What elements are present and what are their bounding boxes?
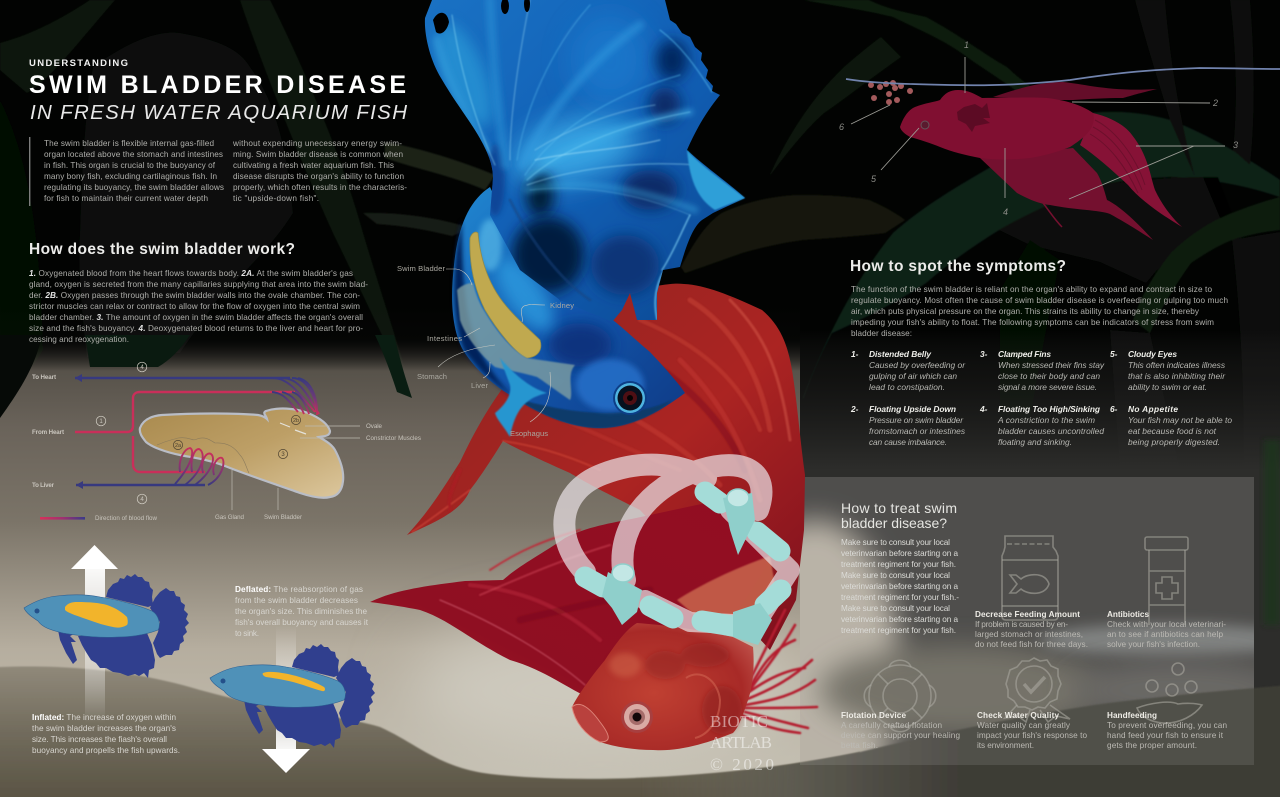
symptoms list: lead to constipation. xyxy=(869,382,945,392)
item: handfeeding: gets the proper amount. xyxy=(1107,741,1197,750)
heading: how does the swim bladder work: How does the swim bladder work? xyxy=(29,241,295,258)
body of blue fish xyxy=(452,187,685,428)
step markers xyxy=(96,362,301,504)
intro text block: tic "upside-down fish". xyxy=(233,194,319,203)
intro text block: ming. Swim bladder disease is common when xyxy=(233,150,403,159)
intro text block: cultivating a fresh water aquarium fish. This xyxy=(233,161,394,170)
notches at top of tail xyxy=(433,13,449,34)
symptoms list: 4- xyxy=(979,404,988,414)
text: inflated: size. This increases the fiash's overall xyxy=(32,735,167,744)
intro text block: organ located above the stomach and intestines xyxy=(44,150,223,159)
symptoms list: can cause imbalance. xyxy=(869,437,947,447)
item: flotation device: device can support your healing xyxy=(841,731,960,740)
fin: lower left red fin xyxy=(370,500,770,698)
gland outline xyxy=(157,438,249,473)
symptoms list: ability to swim or eat. xyxy=(1128,382,1207,392)
diagram labels xyxy=(32,374,421,521)
step markers: 4 xyxy=(140,496,144,503)
title block: IN FRESH WATER AQUARIUM FISH xyxy=(30,101,407,124)
item: antibiotics: Check with your local veterinari- xyxy=(1107,620,1226,629)
panel heading: How to treat swim xyxy=(841,500,957,516)
symptoms list: 6- xyxy=(1110,404,1118,414)
dorsal spikes of red fish xyxy=(740,610,817,733)
internal organs xyxy=(457,283,575,400)
intro text block: properly, which often results in the characteris- xyxy=(233,183,407,192)
panel heading: bladder disease? xyxy=(841,515,947,531)
symptoms list: signal a more severe issue. xyxy=(998,382,1097,392)
intro text block: disease disrupts the organ's ability to function xyxy=(233,172,404,181)
text: inflated xyxy=(32,713,180,755)
callout numbers: 2 xyxy=(1212,98,1218,108)
organ labels on blue fish: Intestines xyxy=(427,334,462,343)
streaks on red fins xyxy=(412,300,790,685)
heading: symptoms: How to spot the symptoms? xyxy=(850,258,1066,275)
item: antibiotics xyxy=(1107,610,1226,649)
leaves: left plants xyxy=(0,0,495,420)
eye of red fish xyxy=(621,701,653,733)
soft wide fin rays xyxy=(437,0,695,210)
pectoral fin xyxy=(957,103,990,132)
intro text block: without expending unecessary energy swim- xyxy=(232,139,402,148)
title block xyxy=(29,58,407,124)
step markers: 1 xyxy=(99,418,103,425)
symptoms list: being properly digested. xyxy=(1128,437,1220,447)
symptoms intro text: bladder disease: xyxy=(851,329,912,338)
text: deflated: from the swim bladder decreases xyxy=(235,596,358,605)
tail xyxy=(1080,113,1182,227)
top fin xyxy=(993,82,1157,100)
symptoms list: Floating Upside Down xyxy=(869,404,956,414)
intro text block: The swim bladder is flexible internal gas-filled xyxy=(44,139,214,148)
fish anatomy diagram xyxy=(839,40,1280,240)
callout numbers xyxy=(839,40,1238,217)
symptoms list: close to their body and can xyxy=(998,371,1100,381)
lips xyxy=(572,704,608,742)
panel: treatment background xyxy=(800,477,1254,765)
explanation text: 1. Oxygenated blood from the heart flows towards body. 2A. At the swim bladder's gas xyxy=(29,269,353,278)
right dark water fade xyxy=(800,330,1280,797)
explanation text: cessing and reoxygenation. xyxy=(29,335,129,344)
sand lighting behind panel xyxy=(800,477,1254,763)
red betta fish illustration xyxy=(370,284,817,750)
watermark: © 2020 xyxy=(710,755,774,774)
explanation text: gland, oxygen is secreted from the many capillaries supplying that area into the swim blad- xyxy=(29,280,368,289)
intro text block: many bony fish, excluding cartilaginous fish. In xyxy=(44,172,217,181)
explanation text: size and the fish's buoyancy. 4. Deoxygenated blood returns to the liver and heart for pro- xyxy=(29,324,363,333)
symptoms list: bladder causes uncontrolled xyxy=(998,426,1104,436)
symptoms list: Clamped Fins xyxy=(998,349,1051,359)
diagram labels: To Heart xyxy=(32,374,56,381)
deflated organ xyxy=(263,672,325,691)
constrictor dashes xyxy=(280,423,306,434)
diagram labels: Swim Bladder xyxy=(264,514,302,521)
symptoms list: 1- xyxy=(851,349,859,359)
foreground dune left xyxy=(0,667,860,797)
intro text block: in fish. This organ is crucial to the buoyancy of xyxy=(44,161,216,170)
foreground dune right xyxy=(640,685,1280,797)
anal fin xyxy=(980,148,1153,240)
organ labels on blue fish: Liver xyxy=(471,381,488,390)
panel intro text: veterinvarian before starting on a xyxy=(841,615,958,624)
body xyxy=(210,665,345,707)
thin fin rays xyxy=(452,0,712,319)
connectors xyxy=(585,492,781,626)
item: decrease feeding: Decrease Feeding Amount xyxy=(975,610,1080,619)
swim bladder diagram xyxy=(32,362,421,522)
fins xyxy=(57,574,189,678)
panel intro text: veterinvarian before starting on a xyxy=(841,582,958,591)
symptoms list: Distended Belly xyxy=(869,349,931,359)
title block: SWIM BLADDER DISEASE xyxy=(29,71,406,99)
pectoral fin of blue fish xyxy=(495,358,547,437)
item: antibiotics: an to see if antibiotics can help xyxy=(1107,630,1223,639)
water line xyxy=(846,68,1280,85)
body xyxy=(24,595,159,637)
diagram labels: To Liver xyxy=(32,482,55,489)
item: water quality: Water quality can greatly xyxy=(977,721,1071,730)
item: flotation device: A carefully crafted flotation xyxy=(841,721,942,730)
panel intro text: veterinvarian before starting on a xyxy=(841,549,958,558)
icon: medicine bottle xyxy=(1145,537,1188,625)
item: water quality: Check Water Quality xyxy=(977,711,1059,720)
blue return line to heart xyxy=(75,377,290,379)
head highlight xyxy=(576,359,644,411)
text: inflated: Inflated: The increase of oxygen within xyxy=(32,713,176,722)
icon: quality badge xyxy=(1005,658,1070,722)
belly of red fish xyxy=(677,556,775,625)
item: water quality xyxy=(977,711,1087,750)
eye of blue fish xyxy=(613,381,647,415)
panel intro text: treatment regiment for your fish. xyxy=(841,560,956,569)
item: water quality: its environment. xyxy=(977,741,1034,750)
symptoms list: 2- xyxy=(850,404,859,414)
symptoms list: gulping of air which can xyxy=(869,371,957,381)
panel intro text: Make sure to consult your local xyxy=(841,571,950,580)
text: deflated: the organ's size. This diminishes the xyxy=(235,607,367,616)
symptoms list: 3- xyxy=(980,349,988,359)
symptoms list: Caused by overfeeding or xyxy=(869,360,966,370)
watermark: ARTLAB xyxy=(710,733,772,752)
text: deflated: Deflated: The reabsorption of gas xyxy=(235,585,363,594)
callout numbers: 3 xyxy=(1233,140,1238,150)
flotation ring device xyxy=(564,465,790,645)
icon: fish food jar xyxy=(1002,536,1058,620)
step markers: 3 xyxy=(281,452,285,458)
symptoms list: eat because food is not xyxy=(1128,426,1217,436)
panel intro text xyxy=(841,538,959,635)
symptoms list: Your fish may not be able to xyxy=(1128,415,1232,425)
icon: hand with pellets xyxy=(1137,663,1202,723)
symptoms intro text: The function of the swim bladder is reliant on the organ's ability to expand and contract in size to xyxy=(851,285,1212,294)
symptoms list: Pressure on swim bladder xyxy=(869,415,964,425)
inflated organ xyxy=(65,602,128,628)
diagram labels: Constrictor Muscles xyxy=(366,435,421,442)
item: flotation device xyxy=(841,711,960,750)
symptoms intro text: regulate buoyancy. Most often the cause of swim bladder disease is overfeeding or gulping too much xyxy=(851,296,1228,305)
explanation text: der. 2B. Oxygen passes through the swim bladder walls into the ovale chamber. The con- xyxy=(29,291,360,300)
arrow: up xyxy=(71,545,118,724)
symptoms list: When stressed their fins stay xyxy=(998,360,1105,370)
symptoms intro text: air, which puts physical pressure on the organ. This strains its ability to change in size, thereby xyxy=(851,307,1200,316)
organ labels on blue fish: Esophagus xyxy=(510,429,548,438)
item: handfeeding: Handfeeding xyxy=(1107,711,1157,720)
symptoms intro text xyxy=(851,285,1228,338)
panel: treatment content xyxy=(841,500,1227,750)
icon: life ring xyxy=(864,660,936,732)
symptoms intro text: impeding your fish's ability to float. The following symptoms can be indicators of stress from swim xyxy=(851,318,1214,327)
fins xyxy=(243,644,375,748)
scale highlights xyxy=(486,250,564,340)
callout numbers: 1 xyxy=(964,40,969,50)
upper capillary loops xyxy=(272,378,319,415)
item: decrease feeding xyxy=(975,610,1088,649)
head of red fish xyxy=(572,623,754,750)
explanation text: bladder chamber. 3. The amount of oxygen in the swim bladder affects the organ's overall xyxy=(29,313,363,322)
vein to liver xyxy=(76,484,205,486)
swim bladder organ xyxy=(470,232,541,358)
organ labels on blue fish xyxy=(397,264,574,438)
callout numbers: 4 xyxy=(1003,207,1008,217)
diagram labels: From Heart xyxy=(32,429,64,436)
panel heading xyxy=(841,500,957,531)
fin: upper red fin xyxy=(407,284,805,650)
step markers: 2b xyxy=(293,418,299,424)
watermark: BIOTIC xyxy=(710,712,768,731)
explanation text: strictor muscles can relax or contract to allow for the flow of oxygen into the central swim xyxy=(29,302,360,311)
fish: deflated bladder xyxy=(210,644,375,748)
symptoms list: This often indicates illness xyxy=(1128,360,1226,370)
intro text block: for fish to maintain their current water depth xyxy=(44,194,208,203)
symptoms list: fromstomach or intestines xyxy=(869,426,966,436)
item: flotation device: betta fish. xyxy=(841,741,878,750)
callout numbers: 6 xyxy=(839,122,844,132)
text: deflated: fish's overall buoyancy and causes it xyxy=(235,618,369,627)
organ labels on blue fish: Stomach xyxy=(417,372,447,381)
diagram labels: Gas Gland xyxy=(215,514,245,521)
bladder organ xyxy=(140,409,343,498)
T-joints xyxy=(602,493,772,645)
small cyan fin xyxy=(687,150,745,210)
item: antibiotics: Antibiotics xyxy=(1107,610,1149,619)
watermark xyxy=(710,712,774,774)
diagram labels: Ovale xyxy=(366,423,383,430)
step markers: 2a xyxy=(175,443,182,449)
step markers: 4 xyxy=(140,364,144,371)
text: deflated: to sink. xyxy=(235,629,259,638)
text: deflated xyxy=(235,585,369,638)
fan tail of blue fish xyxy=(420,0,750,330)
clear tubes xyxy=(564,465,790,625)
symptoms list: floating and sinking. xyxy=(998,437,1072,447)
blue betta fish illustration xyxy=(420,0,750,437)
organ labels on blue fish: Swim Bladder xyxy=(397,264,445,273)
text: inflated: the swim bladder increases the organ's xyxy=(32,724,176,733)
fish: inflated bladder xyxy=(24,574,189,678)
lower capillary loops xyxy=(175,448,223,485)
eye xyxy=(220,678,226,684)
symptoms list: that is also inhibiting their xyxy=(1128,371,1226,381)
panel intro text: treatment regiment for your fish. xyxy=(841,626,956,635)
body xyxy=(900,90,1094,160)
item: antibiotics: solve your fish's infection. xyxy=(1107,640,1200,649)
item: decrease feeding: do not feed fish for three days. xyxy=(975,640,1088,649)
food pellets xyxy=(868,80,913,105)
eye xyxy=(34,608,40,614)
intro text block: regulating its buoyancy, the swim bladder allows xyxy=(44,183,224,192)
symptoms list: 5- xyxy=(1110,349,1118,359)
text: inflated: buoyancy and propells the fish upwards. xyxy=(32,746,180,755)
sand floor xyxy=(0,305,800,797)
symptoms list xyxy=(850,349,1232,447)
leaves: right plants xyxy=(681,0,1280,470)
symptoms list: A constriction to the swim xyxy=(997,415,1095,425)
eye xyxy=(921,121,929,129)
item: handfeeding: hand feed your fish to ensure it xyxy=(1107,731,1224,740)
symptoms list: Floating Too High/Sinking xyxy=(998,404,1100,414)
panel intro text: Make sure to consult your local xyxy=(841,538,950,547)
legend: direction of blood flow: Direction of blood flow xyxy=(95,515,158,522)
symptoms list: No Appetite xyxy=(1128,404,1178,414)
panel intro text: treatment regiment for your fish.- xyxy=(841,593,959,602)
item: handfeeding xyxy=(1107,711,1227,750)
item: decrease feeding: If problem is caused by en- xyxy=(975,620,1068,629)
item: flotation device: Flotation Device xyxy=(841,711,906,720)
callout lines xyxy=(851,57,1225,199)
plant tips over sand xyxy=(0,335,412,418)
item: decrease feeding: larged stomach or intestines, xyxy=(975,630,1083,639)
gill plate xyxy=(686,674,720,738)
legend: direction of blood flow xyxy=(40,515,158,522)
item: water quality: impact your fish's response to xyxy=(977,731,1087,740)
title block: UNDERSTANDING xyxy=(29,58,128,69)
intro text block xyxy=(29,137,407,206)
organ labels on blue fish: Kidney xyxy=(550,301,574,310)
callout numbers: 5 xyxy=(871,174,877,184)
panel intro text: Make sure to consult your local xyxy=(841,604,950,613)
symptoms list: Cloudy Eyes xyxy=(1128,349,1177,359)
body shading xyxy=(454,220,515,398)
artery to capillaries xyxy=(75,392,295,472)
arrow: down xyxy=(262,625,310,773)
item: handfeeding: To prevent overfeeding, you can xyxy=(1107,721,1227,730)
explanation text xyxy=(29,269,368,344)
head mottling xyxy=(609,643,742,734)
